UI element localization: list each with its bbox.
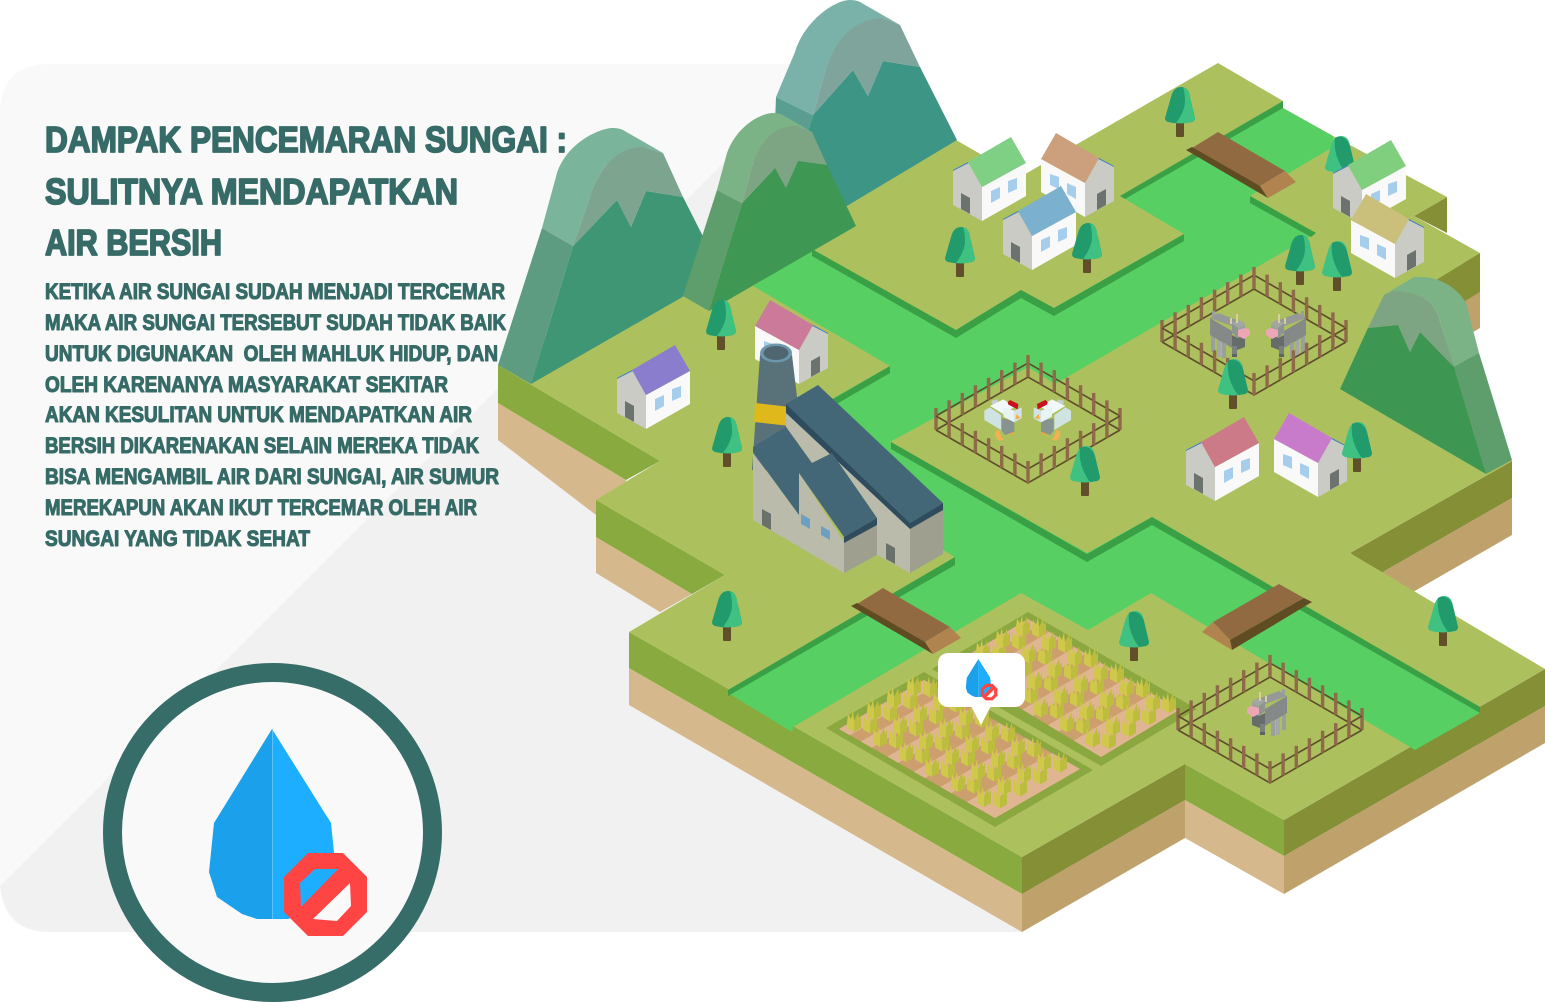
chicken right <box>1034 399 1071 441</box>
river <box>728 108 1480 750</box>
bridge: right <box>1202 584 1312 650</box>
callout: no water <box>938 653 1025 725</box>
cow right <box>1266 311 1306 358</box>
title: AIR BERSIH <box>45 222 222 263</box>
body text: BISA MENGAMBIL AIR DARI SUNGAI, AIR SUMUR <box>45 464 499 489</box>
tree behind right mountain <box>1451 337 1481 387</box>
body text: UNTUK DIGUNAKAN OLEH MAHLUK HIDUP, DAN <box>45 341 498 366</box>
house: light green roof <box>1333 140 1406 224</box>
mountain: left teal green <box>498 128 719 384</box>
house: pink roof <box>755 300 828 384</box>
house: brown roof <box>1041 133 1114 217</box>
body text: KETIKA AIR SUNGAI SUDAH MENJADI TERCEMAR <box>45 279 505 304</box>
factory chimney <box>752 344 800 470</box>
title <box>45 119 567 263</box>
title: SULITNYA MENDAPATKAN <box>45 171 458 212</box>
mountain: back teal <box>770 0 957 256</box>
body text: SUNGAI YANG TIDAK SEHAT <box>45 526 310 551</box>
house: magenta roof <box>1274 413 1347 497</box>
tree: by magenta house <box>1342 422 1372 472</box>
tree: village right <box>1072 223 1102 273</box>
cow single <box>1247 689 1287 736</box>
cow left <box>1210 311 1250 358</box>
soil and grass side faces <box>498 197 1545 932</box>
body text: BERSIH DIKARENAKAN SELAIN MEREKA TIDAK <box>45 433 479 458</box>
river banks <box>728 101 1480 713</box>
chicken pen <box>936 355 1120 483</box>
house: red roof <box>1186 417 1259 501</box>
cow pen bottom <box>1178 655 1362 783</box>
crop field: lower plot <box>826 672 1093 827</box>
tree: lower right <box>1428 596 1458 646</box>
house: green roof <box>953 137 1026 221</box>
cow pen top <box>1162 267 1346 395</box>
tree: right block two <box>1322 241 1352 291</box>
isometric map terrain <box>498 63 1545 932</box>
bridge: left <box>851 588 961 654</box>
trees: back row <box>706 87 1355 350</box>
icon: water drop prohibited in circle <box>112 672 432 992</box>
body text: OLEH KARENANYA MASYARAKAT SEKITAR <box>45 372 448 397</box>
crop field: upper plot <box>932 612 1197 766</box>
house: purple roof <box>617 345 690 429</box>
house: yellow roof <box>1351 194 1424 278</box>
title: DAMPAK PENCEMARAN SUNGAI : <box>45 119 567 160</box>
tree: lower left <box>712 591 742 641</box>
body text: MEREKAPUN AKAN IKUT TERCEMAR OLEH AIR <box>45 495 477 520</box>
body text: AKAN KESULITAN UNTUK MENDAPATKAN AIR <box>45 402 472 427</box>
house: blue roof <box>1003 186 1076 270</box>
tree: near factory <box>712 417 742 467</box>
body text <box>45 279 506 551</box>
tree: lower middle <box>1119 611 1149 661</box>
mountain: middle green <box>683 113 856 311</box>
chicken left <box>984 399 1022 441</box>
tree: by cow pen <box>1218 359 1248 409</box>
mountain: right green <box>1340 277 1512 474</box>
tree: village left <box>945 227 975 277</box>
mini icon: water drop prohibited <box>966 659 997 700</box>
bridge: top <box>1186 132 1296 198</box>
grass ground <box>498 63 1545 857</box>
body text: MAKA AIR SUNGAI TERSEBUT SUDAH TIDAK BAIK <box>45 310 506 335</box>
tree: right block one <box>1285 235 1315 285</box>
factory building <box>753 385 943 573</box>
tree: by chicken pen <box>1070 446 1100 496</box>
background panel <box>0 64 1022 932</box>
